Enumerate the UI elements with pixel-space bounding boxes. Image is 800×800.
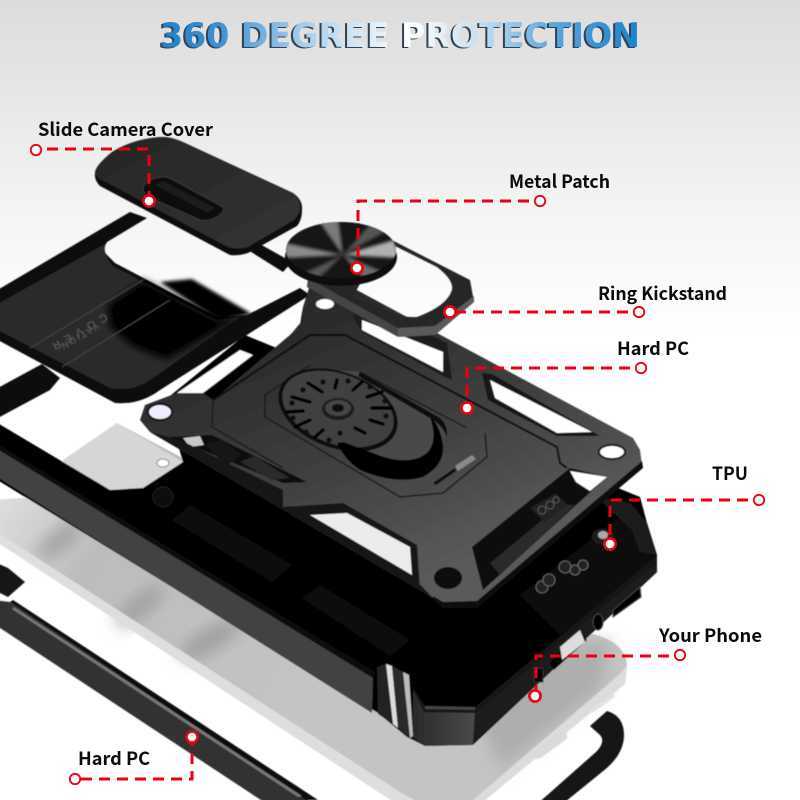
callout: TPU: TPU xyxy=(712,460,748,486)
callout: hard PC frame: Hard PC xyxy=(78,745,150,771)
hard PC back plate xyxy=(140,285,643,608)
lower hard PC frame xyxy=(0,562,624,800)
phone body xyxy=(0,423,627,800)
honeycomb grips xyxy=(536,560,588,593)
slide cover back xyxy=(0,212,310,403)
blurred case corner seen through cover window xyxy=(160,279,252,320)
ring kickstand xyxy=(307,233,474,337)
gear disc xyxy=(267,353,409,467)
panel edge lines xyxy=(213,335,567,468)
callout: TPU xyxy=(604,460,764,550)
callout: hard PC plate xyxy=(461,335,689,414)
metal patch disc xyxy=(285,218,400,286)
metal accents xyxy=(377,664,393,724)
case corner xyxy=(413,690,475,746)
kickstand pill xyxy=(330,370,445,468)
plate right cut xyxy=(472,468,607,590)
kickstand recess xyxy=(337,417,443,480)
interior pads xyxy=(172,505,292,582)
plate holes xyxy=(599,445,625,459)
callout: hard PC frame xyxy=(70,731,198,784)
octagon outline xyxy=(265,365,487,497)
callout: slide camera cover xyxy=(31,116,213,207)
slide camera cover xyxy=(95,137,302,255)
case side band xyxy=(0,446,373,713)
TPU case xyxy=(0,313,657,746)
callout: ring kickstand xyxy=(444,280,727,318)
callout: slide camera cover: Slide Camera Cover xyxy=(38,116,213,142)
slide cover back: VATION xyxy=(60,321,101,351)
cover embossed text: COVER xyxy=(50,310,110,352)
plate windows with white interior xyxy=(353,300,452,380)
side face with ports xyxy=(473,562,657,744)
callout: your phone: Your Phone xyxy=(658,622,762,648)
illustration: exploded phone case xyxy=(0,137,657,800)
callout: metal patch xyxy=(351,168,610,274)
callout: ring kickstand: Ring Kickstand xyxy=(598,280,727,306)
callout: hard PC plate: Hard PC xyxy=(617,335,689,361)
callout: metal patch: Metal Patch xyxy=(509,168,610,194)
callout: your phone xyxy=(529,622,762,702)
case top right corner and buttons xyxy=(596,497,657,555)
window behind top arm xyxy=(177,350,253,393)
plate edge lip xyxy=(433,461,643,608)
title: 360 DEGREE PROTECTION xyxy=(160,16,640,56)
plate arm gap and lower rail xyxy=(170,435,307,483)
